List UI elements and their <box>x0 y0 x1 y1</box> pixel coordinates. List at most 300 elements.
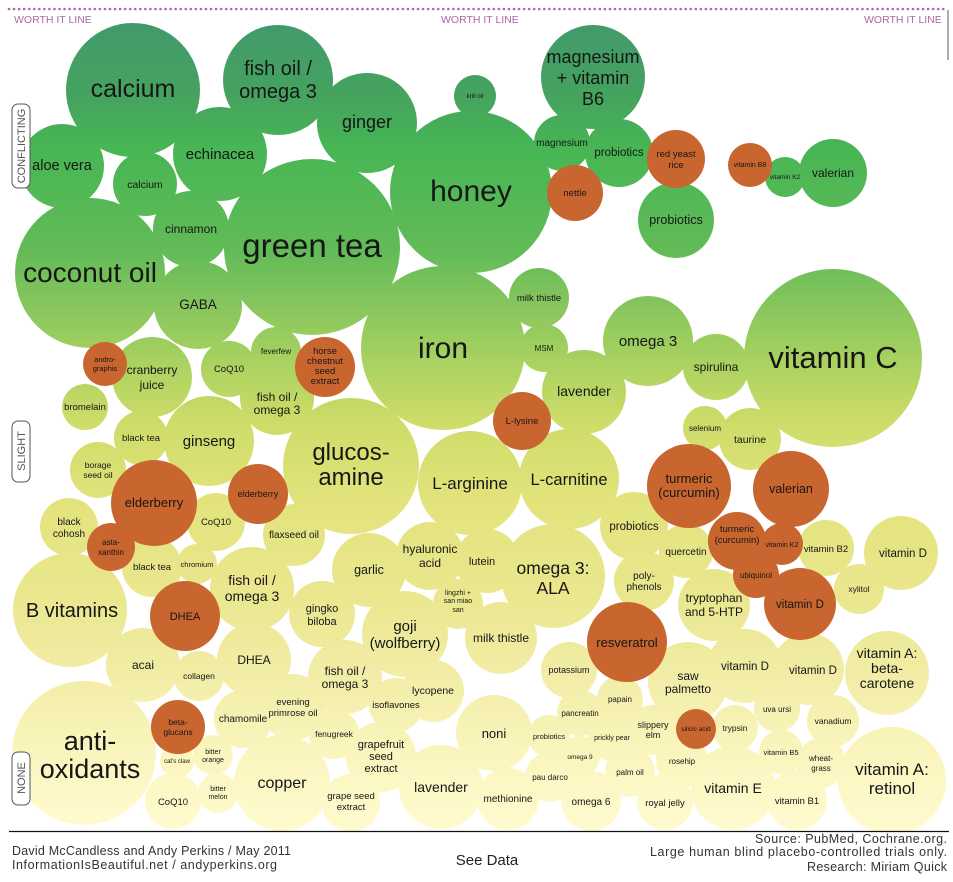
elderberry large <box>111 460 197 546</box>
beta-glucans: beta- <box>168 717 188 727</box>
axis label: none: NONE <box>16 762 28 794</box>
right edge shading <box>947 10 949 60</box>
grape seed extract: extract <box>337 802 366 813</box>
ginger <box>317 73 417 173</box>
milk thistle <box>509 268 569 328</box>
glucosamine <box>283 398 419 534</box>
krill oil <box>454 75 496 117</box>
lycopene: lycopene <box>412 685 454 697</box>
elderberry large: elderberry <box>125 495 184 510</box>
grapefruit seed extract: grapefruit <box>358 739 404 751</box>
vitamin B5: vitamin B5 <box>763 748 799 757</box>
andrographis <box>83 342 127 386</box>
vitamin D: vitamin D <box>721 661 769 673</box>
vitamin B5 <box>759 730 803 774</box>
flaxseed oil <box>263 504 325 566</box>
palm oil: palm oil <box>616 768 644 777</box>
orange bubbles: promising supplements <box>83 130 836 754</box>
echinacea: echinacea <box>186 146 255 163</box>
probiotics: probiotics <box>594 147 644 159</box>
chromium: chromium <box>181 560 213 569</box>
pancreatin: pancreatin <box>561 709 599 718</box>
prickly pear: prickly pear <box>594 735 631 742</box>
copper <box>234 735 330 831</box>
coconut oil: coconut oil <box>23 257 157 288</box>
tryptophan and 5-HTP: tryptophan <box>686 591 742 605</box>
lingzhi + san miao san <box>433 579 483 629</box>
CoQ10 <box>145 773 201 829</box>
vitamin A: retinol <box>838 727 946 835</box>
methionine: methionine <box>484 794 533 805</box>
fish oil / omega 3: fish oil / <box>325 664 365 678</box>
collagen: collagen <box>183 671 215 681</box>
asta-xanthin: xanthin <box>98 548 124 557</box>
vitamin D <box>708 629 782 703</box>
fish oil / omega 3: fish oil / <box>228 572 276 588</box>
copper: copper <box>258 775 307 792</box>
papain: papain <box>608 695 632 704</box>
hyaluronic acid: acid <box>419 556 441 570</box>
magnesium + vitamin B6: magnesium <box>546 47 640 67</box>
vitamin K2: vitamin K2 <box>770 174 801 181</box>
lutein <box>455 529 519 593</box>
vitamin D: vitamin D <box>776 599 824 611</box>
vitamin B8: vitamin B8 <box>734 162 766 169</box>
MSM <box>520 324 568 372</box>
axis label: slight <box>12 421 30 482</box>
horse chestnut seed extract: chestnut <box>307 356 343 367</box>
garlic <box>332 533 406 607</box>
saw palmetto: palmetto <box>665 682 711 696</box>
magnesium + vitamin B6: + vitamin <box>557 68 629 88</box>
trypsin: trypsin <box>722 723 748 733</box>
methionine <box>477 768 539 830</box>
vitamin K2: vitamin K2 <box>766 542 798 549</box>
papain <box>597 676 643 722</box>
calcium small <box>113 152 177 216</box>
magnesium: magnesium <box>536 138 588 149</box>
probiotics <box>528 715 570 757</box>
fenugreek: fenugreek <box>315 729 354 739</box>
omega 3: ALA: omega 3: <box>517 558 589 578</box>
quercetin <box>659 524 713 578</box>
axis label: conflicting <box>12 104 30 188</box>
flaxseed oil: flaxseed oil <box>269 530 319 541</box>
rosehip: rosehip <box>669 757 696 766</box>
tryptophan and 5-HTP <box>678 569 750 641</box>
milk thistle <box>465 602 537 674</box>
vitamin A: beta-carotene: beta- <box>871 660 903 676</box>
vitamin D: vitamin D <box>879 548 927 560</box>
bromelain: bromelain <box>64 402 106 413</box>
see data link: See Data <box>456 852 519 869</box>
spirulina: spirulina <box>694 360 739 374</box>
garlic: garlic <box>354 563 384 577</box>
pau darco <box>525 752 575 802</box>
gingko biloba: biloba <box>307 616 338 628</box>
turmeric (curcumin) large: (curcumin) <box>658 485 720 500</box>
taurine <box>719 408 781 470</box>
elderberry small: elderberry <box>238 489 279 499</box>
borage seed oil: seed oil <box>83 470 113 480</box>
turmeric (curcumin) small: turmeric <box>720 524 754 535</box>
palm oil <box>605 747 655 797</box>
vitamin K2 <box>765 157 805 197</box>
lavender <box>399 745 483 829</box>
isoflavones <box>369 678 423 732</box>
green tea: green tea <box>242 227 382 264</box>
CoQ10: CoQ10 <box>201 517 231 528</box>
footer rule <box>9 830 949 832</box>
acai <box>106 628 180 702</box>
polyphenols: poly- <box>633 571 655 582</box>
gingko biloba: gingko <box>306 603 338 615</box>
milk thistle: milk thistle <box>473 631 529 645</box>
omega 3 <box>603 296 693 386</box>
goji (wolfberry): (wolfberry) <box>370 635 440 652</box>
slippery elm: elm <box>646 730 660 740</box>
anti-oxidants: anti- <box>64 726 116 756</box>
vitamin C <box>744 269 922 447</box>
potassium <box>541 642 597 698</box>
vitamin D <box>764 568 836 640</box>
valerian <box>799 139 867 207</box>
bromelain <box>62 384 108 430</box>
prickly pear <box>588 713 636 761</box>
valerian: valerian <box>812 166 854 180</box>
vitamin B2: vitamin B2 <box>804 544 848 555</box>
feverfew <box>251 327 301 377</box>
L-carnitine: L-carnitine <box>530 471 608 489</box>
CoQ10 <box>201 341 257 397</box>
tryptophan and 5-HTP: and 5-HTP <box>685 605 743 619</box>
lavender: lavender <box>414 779 468 795</box>
andrographis: graphis <box>93 364 118 373</box>
omega 9 <box>560 736 600 776</box>
black tea <box>122 537 182 597</box>
cat's claw: cat's claw <box>164 759 191 765</box>
vitamin A: retinol: vitamin A: <box>855 760 929 779</box>
vanadium <box>807 695 859 747</box>
vitamin A: beta-carotene <box>845 631 929 715</box>
black tea <box>114 411 168 465</box>
B vitamins <box>13 553 127 667</box>
slippery elm: slippery <box>637 720 669 730</box>
black tea: black tea <box>122 433 161 444</box>
valerian: valerian <box>769 482 813 496</box>
bitter orange <box>193 735 233 775</box>
omega 6: omega 6 <box>572 797 611 808</box>
silicic acid: silicic acid <box>681 726 711 733</box>
feverfew: feverfew <box>261 347 291 356</box>
ginseng <box>164 396 254 486</box>
L-arginine: L-arginine <box>432 474 508 493</box>
worth it label left: WORTH IT LINE <box>14 14 92 26</box>
turmeric (curcumin) small <box>708 512 766 570</box>
lavender <box>542 350 626 434</box>
fish oil / omega 3 small: fish oil / <box>257 390 297 404</box>
lavender: lavender <box>557 383 611 399</box>
worth it label right: WORTH IT LINE <box>864 14 942 26</box>
fish oil / omega 3 <box>210 547 294 631</box>
fish oil / omega 3 small: omega 3 <box>254 403 301 417</box>
DHEA <box>217 623 291 697</box>
green tea <box>224 159 400 335</box>
honey <box>390 111 552 273</box>
grape seed extract: grape seed <box>327 791 375 802</box>
GABA <box>154 261 242 349</box>
silicic acid <box>676 709 716 749</box>
L-arginine <box>418 431 522 535</box>
grapefruit seed extract: extract <box>364 763 398 775</box>
omega 9: omega 9 <box>567 754 593 761</box>
aloe vera <box>20 124 104 208</box>
fish oil / omega 3: omega 3 <box>239 81 317 103</box>
bitter orange: orange <box>202 757 224 764</box>
DHEA <box>150 581 220 651</box>
elderberry small <box>228 464 288 524</box>
taurine: taurine <box>734 434 766 446</box>
nettle <box>547 165 603 221</box>
saw palmetto: saw <box>677 669 699 683</box>
horse chestnut seed extract: extract <box>311 376 340 387</box>
probiotics lower: probiotics <box>649 213 703 227</box>
footer credits: David McCandless and Andy Perkins / May 2011 <box>12 844 291 858</box>
iron <box>361 266 525 430</box>
turmeric (curcumin) small: (curcumin) <box>715 535 759 546</box>
noni <box>456 695 532 771</box>
evening primrose oil: evening <box>276 697 310 708</box>
footer sources <box>650 832 948 874</box>
iron: iron <box>418 332 468 365</box>
footer sources: Research: Miriam Quick <box>807 860 948 874</box>
borage seed oil <box>70 442 126 498</box>
krill oil: krill oil <box>467 94 483 100</box>
asta-xanthin: asta- <box>102 538 120 547</box>
goji (wolfberry) <box>362 591 448 677</box>
black tea: black tea <box>133 562 172 573</box>
CoQ10: CoQ10 <box>158 797 188 808</box>
turmeric (curcumin) large: turmeric <box>666 471 712 486</box>
footer sources: Source: PubMed, Cochrane.org. <box>755 832 947 846</box>
turmeric (curcumin) large <box>647 444 731 528</box>
cinnamon: cinnamon <box>165 222 217 236</box>
grapefruit seed extract: seed <box>369 751 393 763</box>
vitamin D <box>772 633 844 705</box>
grape seed extract <box>322 774 380 832</box>
L-carnitine <box>519 429 619 529</box>
probiotics <box>600 492 668 560</box>
footer sources: Large human blind placebo-controlled trials only. <box>650 845 947 859</box>
vitamin C: vitamin C <box>768 340 898 375</box>
milk thistle: milk thistle <box>517 293 561 304</box>
B vitamins: B vitamins <box>26 600 118 622</box>
xylitol <box>834 564 884 614</box>
selenium <box>683 406 727 450</box>
bitter melon: melon <box>208 794 228 801</box>
L-lysine: L-lysine <box>506 416 538 427</box>
L-lysine <box>493 392 551 450</box>
nettle: nettle <box>563 188 587 199</box>
vanadium: vanadium <box>815 716 851 726</box>
spirulina <box>683 334 749 400</box>
coconut oil <box>15 198 165 348</box>
lingzhi + san miao san: san <box>452 607 464 614</box>
hyaluronic acid: hyaluronic <box>403 542 457 556</box>
asta-xanthin <box>87 523 135 571</box>
probiotics lower <box>638 182 714 258</box>
fish oil / omega 3 small <box>240 361 314 435</box>
cat's claw <box>160 744 194 778</box>
borage seed oil: borage <box>85 460 111 470</box>
noni: noni <box>482 726 506 741</box>
axis label: none <box>12 752 30 805</box>
probiotics <box>585 119 653 187</box>
slippery elm <box>628 705 678 755</box>
probiotics: probiotics <box>609 521 659 533</box>
fish oil / omega 3: omega 3 <box>225 588 279 604</box>
magnesium <box>534 115 590 171</box>
vitamin B8 <box>728 143 772 187</box>
GABA: GABA <box>179 297 217 312</box>
calcium: calcium <box>91 75 175 103</box>
evening primrose oil <box>260 674 326 740</box>
echinacea <box>173 107 267 201</box>
footer background mask <box>0 832 953 882</box>
fish oil / omega 3 <box>223 25 333 135</box>
black cohosh: cohosh <box>53 529 85 540</box>
royal jelly <box>637 774 693 830</box>
lycopene <box>402 660 464 722</box>
CoQ10: CoQ10 <box>214 364 244 375</box>
gingko biloba <box>289 581 355 647</box>
valerian <box>753 451 829 527</box>
wheatgrass: grass <box>811 764 831 773</box>
potassium: potassium <box>548 665 590 675</box>
bitter orange: bitter <box>205 749 221 756</box>
magnesium + vitamin B6 <box>541 25 645 129</box>
cranberry juice: cranberry <box>127 363 177 377</box>
anti-oxidants <box>12 681 156 825</box>
ubiquinol: ubiquinol <box>740 571 772 580</box>
DHEA: DHEA <box>170 611 201 623</box>
vitamin D <box>864 516 938 590</box>
polyphenols: phenols <box>626 582 662 593</box>
ubiquinol <box>733 552 779 598</box>
calcium <box>66 23 200 157</box>
chamomile: chamomile <box>219 714 268 725</box>
bitter melon: bitter <box>210 786 226 793</box>
beta-glucans: glucans <box>163 727 193 737</box>
chromium <box>177 544 217 584</box>
vitamin B1: vitamin B1 <box>775 796 819 807</box>
red yeast rice: rice <box>668 160 684 171</box>
vitamin B2 <box>798 520 854 576</box>
royal jelly: royal jelly <box>645 798 685 809</box>
red yeast rice: red yeast <box>656 149 696 160</box>
ginger: ginger <box>342 112 392 132</box>
fish oil / omega 3: fish oil / <box>244 58 312 80</box>
goji (wolfberry): goji <box>393 618 417 635</box>
vitamin A: retinol: retinol <box>869 779 915 798</box>
horse chestnut seed extract: horse <box>313 346 337 357</box>
horse chestnut seed extract: seed <box>315 366 335 377</box>
axis label: conflicting: CONFLICTING <box>16 109 28 183</box>
beta-glucans <box>151 700 205 754</box>
fish oil / omega 3 <box>308 640 382 714</box>
lingzhi + san miao san: lingzhi + <box>445 590 471 597</box>
grapefruit seed extract <box>346 722 416 792</box>
uva ursi: uva ursi <box>763 705 791 714</box>
wheatgrass: wheat- <box>809 754 833 763</box>
magnesium + vitamin B6: B6 <box>582 89 604 109</box>
xylitol: xylitol <box>848 584 870 594</box>
footer credits: InformationIsBeautiful.net / andyperkins.org <box>12 858 277 872</box>
omega 3: ALA <box>501 524 605 628</box>
vitamin A: beta-carotene: carotene <box>860 675 914 691</box>
resveratrol <box>587 602 667 682</box>
worth it line <box>9 9 948 26</box>
omega 3: omega 3 <box>619 333 677 350</box>
anti-oxidants: oxidants <box>40 754 140 784</box>
probiotics: probiotics <box>533 732 565 741</box>
vitamin A: beta-carotene: vitamin A: <box>857 645 917 661</box>
ginseng: ginseng <box>183 433 235 450</box>
glucosamine: glucos- <box>312 439 390 466</box>
saw palmetto <box>648 642 728 722</box>
red yeast rice <box>647 130 705 188</box>
omega 6 <box>561 771 621 831</box>
polyphenols <box>614 551 674 611</box>
pancreatin <box>557 690 603 736</box>
honey: honey <box>430 175 512 208</box>
rosehip <box>656 735 708 787</box>
DHEA: DHEA <box>237 653 271 667</box>
lingzhi + san miao san: san miao <box>444 598 472 605</box>
acai: acai <box>132 658 154 672</box>
trypsin <box>712 705 758 751</box>
worth it label center: WORTH IT LINE <box>441 14 519 26</box>
MSM: MSM <box>535 344 554 353</box>
horse chestnut seed extract <box>295 337 355 397</box>
resveratrol: resveratrol <box>596 635 658 650</box>
vitamin E: vitamin E <box>704 780 762 796</box>
wheatgrass <box>796 738 846 788</box>
quercetin: quercetin <box>665 547 707 558</box>
isoflavones: isoflavones <box>372 700 420 711</box>
cranberry juice <box>112 337 192 417</box>
aloe vera: aloe vera <box>32 158 93 174</box>
fish oil / omega 3: omega 3 <box>322 677 369 691</box>
glucosamine: amine <box>318 464 384 491</box>
collagen <box>174 651 224 701</box>
vitamin D: vitamin D <box>789 665 837 677</box>
bitter melon <box>198 773 238 813</box>
pau darco: pau darco <box>532 773 568 782</box>
cranberry juice: juice <box>139 378 165 392</box>
vitamin B1 <box>767 770 827 830</box>
hyaluronic acid <box>396 522 464 590</box>
evening primrose oil: primrose oil <box>268 708 318 719</box>
black cohosh: black <box>57 517 81 528</box>
omega 3: ALA: ALA <box>536 578 570 598</box>
black cohosh <box>40 498 98 556</box>
vitamin K2 <box>761 523 803 565</box>
fenugreek <box>309 709 359 759</box>
andrographis: andro- <box>94 355 116 364</box>
chamomile <box>214 690 272 748</box>
cinnamon <box>153 191 229 267</box>
